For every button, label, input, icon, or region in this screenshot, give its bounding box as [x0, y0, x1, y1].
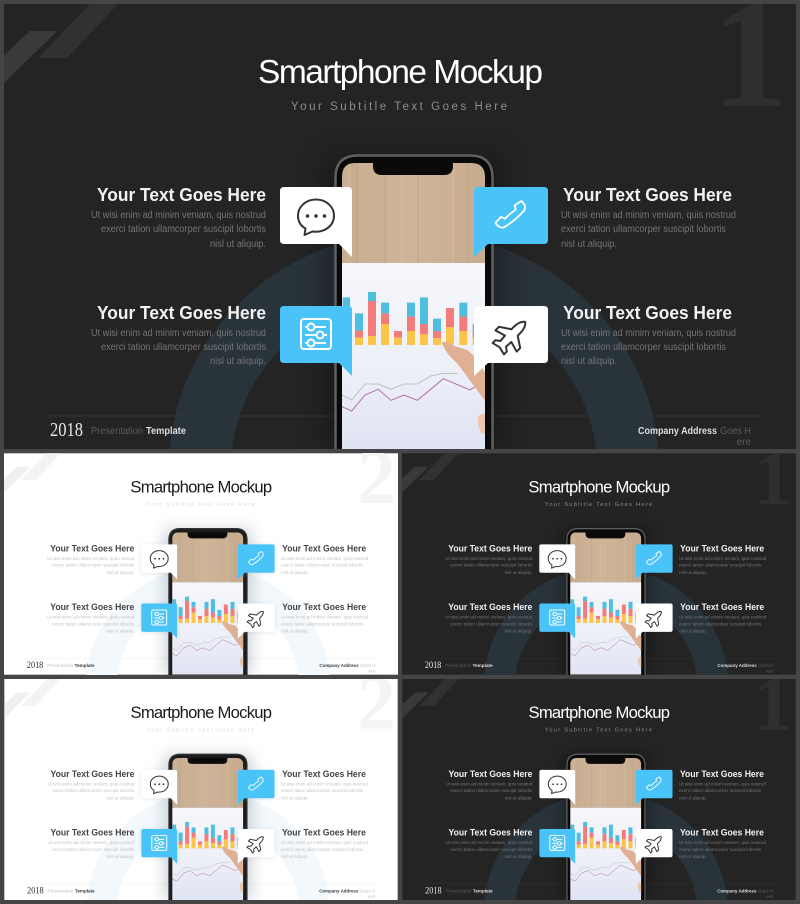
callout: phone — [238, 770, 275, 805]
text block: bottom right: Ut wisi enim ad minim veniam, quis nostrud — [281, 614, 368, 620]
text block: top left: Ut wisi enim ad minim veniam, quis nostrud — [47, 556, 135, 562]
subtitle: Your Subtitle Text Goes Here — [545, 502, 652, 508]
text block: bottom left: exerci tation ullamcorper suscipit lobortis — [450, 621, 533, 627]
text block: top right: exerci tation ullamcorper suscipit lobortis — [679, 563, 762, 569]
footer divider — [423, 657, 778, 659]
text block: bottom right — [679, 827, 766, 860]
text block: top right: exerci tation ullamcorper suscipit lobortis — [679, 788, 761, 794]
text block: top left: nisl ut aliquip. — [210, 239, 266, 250]
footer right: Goes H — [360, 663, 376, 669]
text block: top right: nisl ut aliquip. — [561, 239, 617, 250]
smartphone mockup — [164, 528, 252, 676]
footer left: Presentation — [48, 889, 74, 895]
text block: top right: Your Text Goes Here — [680, 543, 764, 553]
watermark numeral: 1 — [754, 661, 792, 747]
footer divider — [26, 883, 380, 885]
text block: bottom right: Ut wisi enim ad minim veniam, quis nostrud — [679, 614, 766, 620]
callout: phone — [636, 544, 673, 579]
footer left: 2018 — [425, 660, 441, 671]
footer left: Presentation — [91, 426, 143, 437]
footer left: Presentation — [47, 663, 73, 669]
footer right — [638, 426, 751, 448]
text block: bottom left: exerci tation ullamcorper suscipit lobortis — [451, 847, 533, 853]
footer right: ere — [737, 437, 751, 448]
subtitle: Your Subtitle Text Goes Here — [147, 502, 254, 508]
text block: top right: Your Text Goes Here — [563, 185, 732, 205]
text block: bottom right — [281, 602, 368, 634]
text block: top left — [47, 543, 135, 576]
footer right: Company Address — [717, 889, 757, 895]
title: Smartphone Mockup — [528, 478, 670, 497]
text block: bottom left — [91, 303, 266, 367]
background arc — [500, 582, 712, 677]
footer divider — [47, 415, 760, 417]
decorative diagonal bands — [4, 679, 61, 718]
footer right: ere — [766, 894, 774, 900]
footer right: Company Address — [638, 426, 717, 437]
footer right: ere — [368, 894, 376, 900]
callout: settings — [280, 306, 352, 376]
footer left: 2018 — [27, 886, 44, 897]
callout: settings — [141, 829, 177, 864]
subtitle: Your Subtitle Text Goes Here — [545, 728, 652, 734]
thumbnail slide: light, row 1 — [4, 434, 398, 675]
text block: bottom right: nisl ut aliquip. — [281, 854, 309, 860]
footer left: Template — [75, 663, 95, 669]
footer right: Goes H — [720, 426, 751, 437]
decorative diagonal bands — [402, 679, 459, 718]
text block: bottom left: Ut wisi enim ad minim veniam, quis nostrud — [48, 840, 135, 846]
footer right: Goes H — [758, 663, 774, 669]
background arc — [102, 582, 314, 677]
text block: top left: exerci tation ullamcorper suscipit lobortis — [53, 788, 135, 794]
title: Smartphone Mockup — [130, 703, 272, 722]
text block: top right: Ut wisi enim ad minim veniam, quis nostrud — [281, 556, 368, 562]
title: Smartphone Mockup — [130, 478, 272, 497]
text block: top left: Your Text Goes Here — [449, 769, 532, 779]
footer right — [717, 889, 774, 900]
text block: bottom right: nisl ut aliquip. — [679, 628, 707, 634]
footer left: Template — [473, 889, 493, 895]
callout: settings — [539, 829, 575, 864]
footer divider — [424, 883, 778, 885]
text block: top left: Ut wisi enim ad minim veniam, quis nostrud — [48, 781, 135, 787]
callout: plane — [238, 829, 275, 864]
callout: phone — [636, 770, 673, 805]
text block: top left: exerci tation ullamcorper suscipit lobortis — [52, 563, 135, 569]
text block: top left: Ut wisi enim ad minim veniam, quis nostrud — [446, 781, 533, 787]
callout: plane — [238, 604, 275, 638]
text block: top right — [561, 185, 736, 250]
text block: bottom left — [446, 827, 533, 860]
text block: top right — [679, 543, 766, 576]
text block: bottom left: nisl ut aliquip. — [504, 628, 532, 634]
decorative diagonal bands — [402, 453, 459, 493]
text block: bottom right: Your Text Goes Here — [282, 602, 366, 612]
footer left: Template — [75, 889, 95, 895]
text block: bottom right: nisl ut aliquip. — [281, 628, 309, 634]
footer divider — [25, 657, 380, 659]
footer right — [319, 889, 376, 900]
main slide: dark, large — [4, 0, 796, 449]
text block: top left: nisl ut aliquip. — [107, 796, 134, 802]
footer left: Template — [146, 426, 186, 437]
text block: top right: Your Text Goes Here — [680, 769, 764, 779]
smartphone mockup — [325, 155, 503, 452]
text block: top left — [445, 543, 533, 576]
text block: bottom left: Ut wisi enim ad minim veniam, quis nostrud — [47, 614, 135, 620]
text block: bottom right: Your Text Goes Here — [563, 303, 732, 323]
callout: plane — [636, 604, 673, 638]
background arc — [201, 263, 627, 453]
text block: bottom right: exerci tation ullamcorper suscipit lobortis — [679, 847, 761, 853]
text block: top left — [91, 185, 266, 250]
callout: plane — [474, 306, 548, 376]
text block: bottom left: nisl ut aliquip. — [107, 854, 134, 860]
text block: top left — [48, 769, 135, 802]
text block: bottom right: exerci tation ullamcorper suscipit lobortis — [281, 621, 364, 627]
text block: bottom left — [445, 602, 533, 634]
text block: bottom right: exerci tation ullamcorper suscipit lobortis — [281, 847, 363, 853]
text block: top right: exerci tation ullamcorper suscipit lobortis — [281, 788, 363, 794]
text block: bottom left: Ut wisi enim ad minim veniam, quis nostrud — [91, 328, 266, 339]
text block: bottom left: Your Text Goes Here — [448, 602, 532, 612]
subtitle: Your Subtitle Text Goes Here — [147, 728, 254, 734]
text block: bottom left: Ut wisi enim ad minim veniam, quis nostrud — [445, 614, 533, 620]
text block: bottom right: exerci tation ullamcorper suscipit lobortis — [679, 621, 762, 627]
text block: top right — [679, 769, 766, 802]
footer right: Company Address — [717, 663, 757, 669]
text block: bottom left: Your Text Goes Here — [449, 827, 532, 837]
text block: top left: Your Text Goes Here — [50, 543, 134, 553]
thumbnail slide: light, row 2 — [4, 660, 398, 900]
subtitle: Your Subtitle Text Goes Here — [291, 101, 507, 113]
footer left: 2018 — [50, 419, 83, 441]
text block: top right: exerci tation ullamcorper suscipit lobortis — [281, 563, 364, 569]
footer right: Goes H — [360, 889, 376, 895]
callout: chat — [141, 544, 177, 579]
callout: chat — [141, 770, 177, 805]
footer left — [27, 660, 95, 671]
text block: bottom right: nisl ut aliquip. — [679, 854, 707, 860]
background arc — [500, 808, 712, 902]
text block: top right — [281, 769, 368, 802]
text block: bottom left: Your Text Goes Here — [97, 303, 266, 323]
callout: chat — [539, 544, 575, 579]
footer right: Goes H — [758, 889, 774, 895]
text block: top right — [281, 543, 368, 576]
text block: top right: nisl ut aliquip. — [281, 796, 309, 802]
text block: bottom left: exerci tation ullamcorper suscipit lobortis — [101, 342, 266, 353]
callout: phone — [238, 544, 275, 579]
title: Smartphone Mockup — [258, 54, 543, 91]
footer left: Template — [473, 663, 493, 669]
text block: bottom right: Ut wisi enim ad minim veniam, quis nostrud — [561, 328, 736, 339]
background arc — [102, 808, 314, 902]
footer left — [425, 660, 493, 671]
footer right: Company Address — [319, 663, 359, 669]
text block: bottom right: Your Text Goes Here — [680, 827, 764, 837]
footer left: 2018 — [27, 660, 43, 671]
footer right — [319, 663, 376, 675]
text block: top right: Ut wisi enim ad minim veniam, quis nostrud — [679, 556, 766, 562]
smartphone mockup — [562, 754, 650, 901]
text block: top right: nisl ut aliquip. — [281, 570, 309, 576]
callout: chat — [280, 187, 352, 257]
smartphone mockup — [164, 754, 252, 901]
text block: bottom left — [48, 827, 135, 860]
footer right: Company Address — [319, 889, 359, 895]
text block: top left: Ut wisi enim ad minim veniam, quis nostrud — [445, 556, 533, 562]
text block: bottom left — [47, 602, 135, 634]
text block: bottom right — [281, 827, 368, 860]
text block: top right: nisl ut aliquip. — [679, 796, 707, 802]
text block: top right: Your Text Goes Here — [282, 543, 366, 553]
text block: top right: Ut wisi enim ad minim veniam, quis nostrud — [281, 781, 368, 787]
text block: top left: Ut wisi enim ad minim veniam, quis nostrud — [91, 210, 266, 221]
footer left — [425, 886, 493, 897]
footer left: Presentation — [446, 889, 472, 895]
footer right: ere — [766, 669, 774, 675]
text block: top left: nisl ut aliquip. — [106, 570, 134, 576]
title: Smartphone Mockup — [528, 703, 670, 722]
text block: top right: Ut wisi enim ad minim veniam, quis nostrud — [679, 781, 766, 787]
text block: bottom right: Your Text Goes Here — [282, 827, 366, 837]
footer right: ere — [368, 669, 376, 675]
watermark numeral: 2 — [357, 434, 396, 520]
text block: bottom right: nisl ut aliquip. — [561, 356, 617, 367]
text block: bottom left: nisl ut aliquip. — [210, 356, 266, 367]
text block: top right: Your Text Goes Here — [282, 769, 366, 779]
text block: bottom left: Your Text Goes Here — [51, 827, 134, 837]
watermark numeral: 2 — [357, 660, 396, 746]
text block: top right: exerci tation ullamcorper suscipit lobortis — [561, 224, 726, 235]
text block: top right: nisl ut aliquip. — [679, 570, 707, 576]
text block: top left — [446, 769, 533, 802]
text block: bottom right — [679, 602, 766, 634]
text block: top left: exerci tation ullamcorper suscipit lobortis — [101, 224, 266, 235]
text block: bottom left: exerci tation ullamcorper suscipit lobortis — [52, 621, 135, 627]
footer left: 2018 — [425, 886, 442, 897]
thumbnail slide: dark, row 2 — [402, 661, 796, 900]
text block: top left: Your Text Goes Here — [51, 769, 134, 779]
decorative diagonal bands — [4, 453, 61, 493]
callout: phone — [474, 187, 548, 257]
callout: chat — [539, 770, 575, 805]
text block: bottom left: exerci tation ullamcorper suscipit lobortis — [53, 847, 135, 853]
text block: bottom left: Ut wisi enim ad minim veniam, quis nostrud — [446, 840, 533, 846]
decorative diagonal bands — [4, 4, 118, 83]
footer left — [27, 886, 95, 897]
text block: bottom right: Your Text Goes Here — [680, 602, 764, 612]
text block: bottom left: Your Text Goes Here — [50, 602, 134, 612]
text block: top left: exerci tation ullamcorper suscipit lobortis — [451, 788, 533, 794]
text block: bottom right: Ut wisi enim ad minim veniam, quis nostrud — [679, 840, 766, 846]
watermark numeral: 1 — [754, 435, 792, 521]
footer left: Presentation — [445, 663, 471, 669]
callout: settings — [539, 604, 575, 638]
text block: top left: Your Text Goes Here — [448, 543, 532, 553]
text block: bottom right: Ut wisi enim ad minim veniam, quis nostrud — [281, 840, 368, 846]
text block: bottom right — [561, 303, 736, 367]
text block: top left: Your Text Goes Here — [97, 185, 266, 205]
text block: top left: exerci tation ullamcorper suscipit lobortis — [450, 563, 533, 569]
text block: bottom right: exerci tation ullamcorper suscipit lobortis — [561, 342, 726, 353]
text block: top right: Ut wisi enim ad minim veniam, quis nostrud — [561, 210, 736, 221]
footer left — [50, 419, 186, 441]
text block: bottom left: nisl ut aliquip. — [505, 854, 532, 860]
callout: settings — [141, 604, 177, 638]
text block: top left: nisl ut aliquip. — [505, 796, 532, 802]
thumbnail slide: dark, row 1 — [402, 435, 796, 675]
callout: plane — [636, 829, 673, 864]
text block: bottom left: nisl ut aliquip. — [106, 628, 134, 634]
text block: top left: nisl ut aliquip. — [504, 570, 532, 576]
footer right — [717, 663, 774, 675]
smartphone mockup — [562, 528, 650, 676]
